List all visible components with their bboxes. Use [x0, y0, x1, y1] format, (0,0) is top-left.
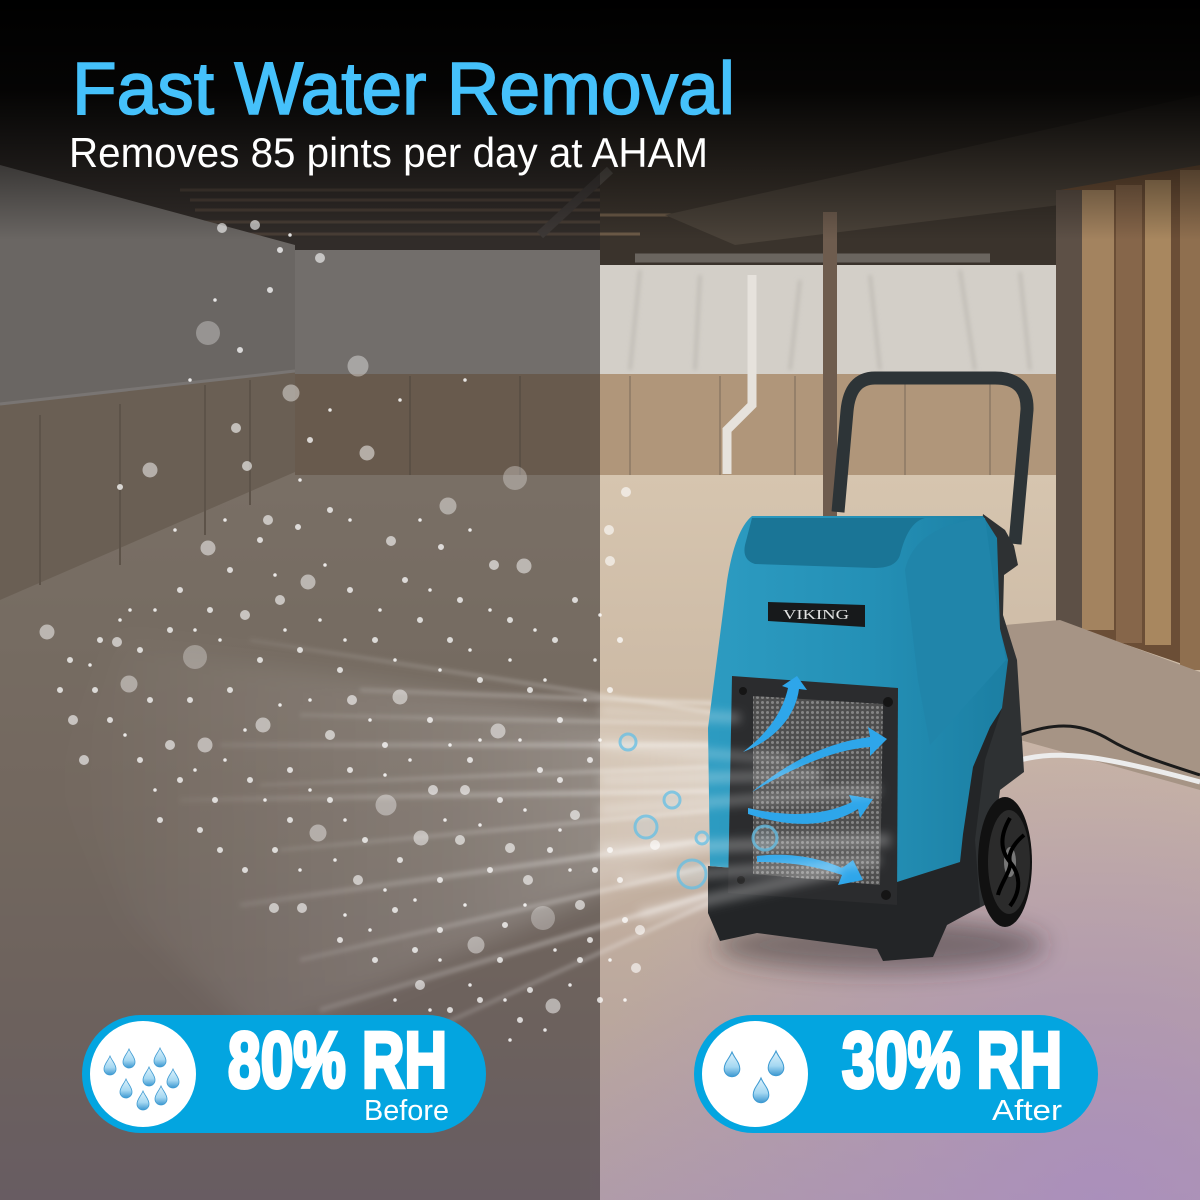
floor shadow patch: [1005, 620, 1200, 790]
white drain pipe: [727, 275, 752, 474]
top dark gradient: [0, 0, 1200, 240]
ceiling: [0, 0, 1200, 270]
badge: 80% RH before: [82, 1015, 486, 1133]
air streak overlay on unit: [600, 710, 890, 915]
black base: [708, 708, 1002, 961]
title: Fast Water Removal: [72, 47, 735, 130]
support column: [823, 212, 837, 522]
soft fan glow: [60, 640, 740, 1040]
value: 30% RH: [842, 1015, 1062, 1104]
dark overlay: before half: [0, 0, 600, 1200]
top handle recess: [744, 518, 925, 568]
subtitle: Removes 85 pints per day at AHAM: [69, 129, 708, 176]
large bubbles: [195, 333, 543, 918]
icon: few water drops: [702, 1021, 808, 1127]
wheel: [978, 797, 1032, 927]
left wall: [0, 165, 295, 600]
ground shadow: [715, 919, 1045, 971]
power cables: [1020, 726, 1200, 782]
arrow 2: [752, 727, 887, 792]
blue body: [708, 516, 1008, 882]
label: Before: [364, 1095, 449, 1127]
filter panel: [728, 676, 898, 905]
brand plate: VIKING: [783, 608, 849, 623]
fine streaks: [180, 640, 790, 1030]
blue water rings: [620, 734, 777, 888]
arrow 4: [757, 855, 863, 885]
ceiling pipe: [635, 254, 990, 262]
arrow 1: [743, 676, 807, 752]
icon: many water drops: [90, 1021, 196, 1127]
brand plate: [768, 602, 865, 627]
value: 80% RH: [228, 1015, 447, 1104]
badge: 30% RH after: [694, 1015, 1098, 1133]
arrow 3: [748, 795, 873, 824]
label: After: [992, 1095, 1062, 1127]
airflow arrows: [743, 676, 887, 885]
dehumidifier unit: [708, 378, 1045, 971]
back wall: [295, 250, 1060, 475]
dark rear housing: [930, 514, 1024, 925]
wood stud framing: [1056, 165, 1200, 670]
water vapor bubbles: [47, 225, 655, 1040]
air flow streaks: [60, 640, 790, 1040]
handle: [838, 378, 1027, 544]
side shading: [905, 518, 1006, 745]
